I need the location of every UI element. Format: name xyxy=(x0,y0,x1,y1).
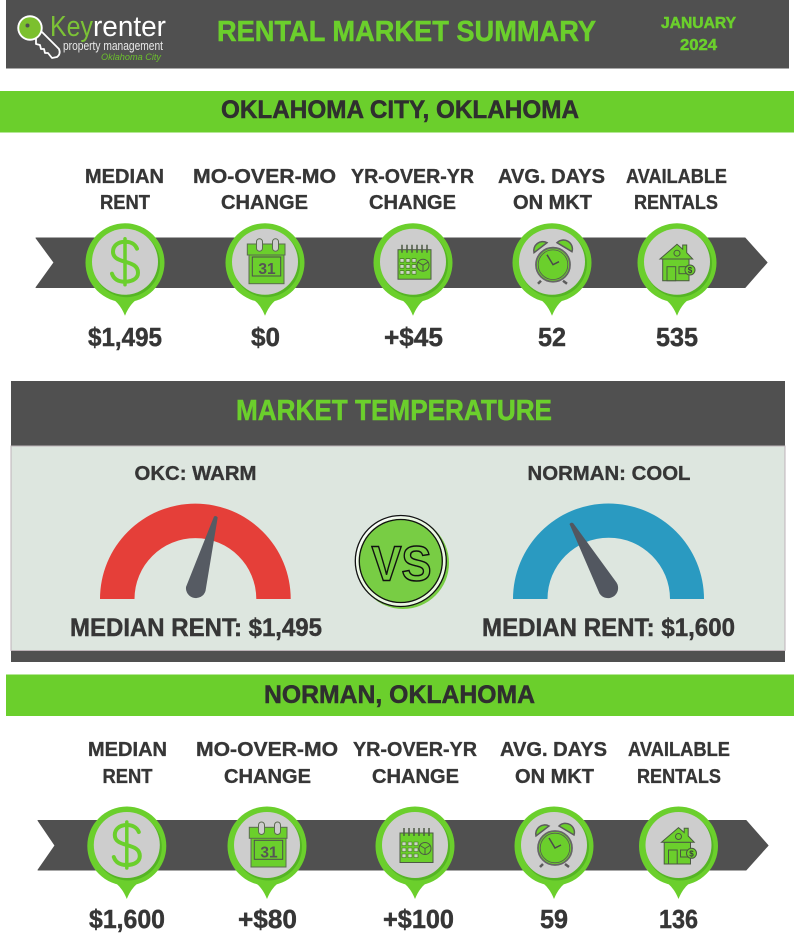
metric labels: Oklahoma City xyxy=(85,165,727,214)
logo: Keyrenter xyxy=(17,11,166,63)
metric labels: Oklahoma City: CHANGE xyxy=(221,191,308,214)
metric labels: Oklahoma City: AVAILABLE xyxy=(626,165,727,188)
icon pin: year over year xyxy=(374,223,452,316)
metric values: Oklahoma City: 535 xyxy=(656,322,698,352)
ribbon: Norman xyxy=(38,820,768,870)
metric labels: Norman: MEDIAN xyxy=(88,738,167,761)
metric labels: Norman xyxy=(88,738,730,788)
section band: Norman xyxy=(6,674,794,716)
date: JANUARY xyxy=(661,15,737,32)
metric labels: Oklahoma City: MO-OVER-MO xyxy=(193,165,336,188)
metric labels: Oklahoma City: MEDIAN xyxy=(85,165,164,188)
icon pin: year over year xyxy=(376,806,454,899)
icon pin: month over month xyxy=(226,223,304,316)
metric labels: Norman: RENT xyxy=(102,765,153,788)
header banner xyxy=(6,0,789,68)
metric labels: Oklahoma City: YR-OVER-YR xyxy=(351,165,474,188)
icon pin: available rentals xyxy=(639,806,718,899)
date xyxy=(661,15,737,54)
gauge: Norman cool xyxy=(482,462,735,642)
icon pin: month over month xyxy=(228,806,306,899)
VS badge: VS xyxy=(372,538,432,592)
metric labels: Norman: YR-OVER-YR xyxy=(353,738,477,761)
ribbon: Oklahoma City xyxy=(36,238,767,288)
metric labels: Norman: AVAILABLE xyxy=(628,738,730,761)
metric values: Norman: 59 xyxy=(540,904,568,934)
heading: MARKET TEMPERATURE xyxy=(236,395,552,427)
metric labels: Norman: CHANGE xyxy=(372,765,459,788)
metric values: Norman: 136 xyxy=(659,904,698,934)
metric values: Oklahoma City: $1,495 xyxy=(88,322,162,352)
icon pin: days on market xyxy=(512,223,592,316)
metric labels: Oklahoma City: RENTALS xyxy=(634,191,718,214)
metric values: Norman xyxy=(89,904,698,934)
gauge: Norman cool: NORMAN: COOL xyxy=(528,462,690,485)
gauge: OKC warm: MEDIAN RENT: $1,495 xyxy=(70,614,322,642)
gauge: OKC warm: OKC: WARM xyxy=(134,462,256,485)
icon pin: median rent xyxy=(86,223,164,316)
gauge: Norman cool: MEDIAN RENT: $1,600 xyxy=(482,614,735,642)
metric labels: Norman: CHANGE xyxy=(224,765,311,788)
metric labels: Oklahoma City: RENT xyxy=(100,191,150,214)
metric values: Norman: +$80 xyxy=(238,904,297,934)
metric values: Norman: $1,600 xyxy=(89,904,165,934)
VS badge xyxy=(355,516,449,609)
panel: market temperature xyxy=(11,381,785,662)
logo: Keyrenter: property management xyxy=(63,38,163,53)
logo: Keyrenter: Oklahoma City xyxy=(101,52,162,63)
metric values: Oklahoma City: +$45 xyxy=(384,322,443,352)
section band: Norman: NORMAN, OKLAHOMA xyxy=(264,681,535,709)
gauge: OKC warm xyxy=(70,462,322,642)
section band: Oklahoma City xyxy=(0,91,794,132)
logo: Keyrenter: renter xyxy=(93,11,166,43)
metric labels: Norman: RENTALS xyxy=(637,765,721,788)
metric labels: Norman: MO-OVER-MO xyxy=(196,738,338,761)
metric labels: Norman: ON MKT xyxy=(515,765,594,788)
metric labels: Oklahoma City: CHANGE xyxy=(369,191,456,214)
metric labels: Norman: AVG. DAYS xyxy=(500,738,607,761)
metric values: Oklahoma City: $0 xyxy=(251,322,280,352)
icon pin: days on market xyxy=(514,806,594,899)
date: 2024 xyxy=(680,37,717,54)
icon pin: available rentals xyxy=(638,223,716,316)
logo: Keyrenter: Key xyxy=(50,11,93,43)
metric values: Norman: +$100 xyxy=(383,904,454,934)
title: RENTAL MARKET SUMMARY xyxy=(217,16,596,48)
metric labels: Oklahoma City: ON MKT xyxy=(513,191,592,214)
metric values: Oklahoma City xyxy=(88,322,698,352)
section band: Oklahoma City: OKLAHOMA CITY, OKLAHOMA xyxy=(221,96,579,124)
metric labels: Oklahoma City: AVG. DAYS xyxy=(498,165,605,188)
icon pin: median rent xyxy=(87,806,166,899)
metric values: Oklahoma City: 52 xyxy=(538,322,566,352)
